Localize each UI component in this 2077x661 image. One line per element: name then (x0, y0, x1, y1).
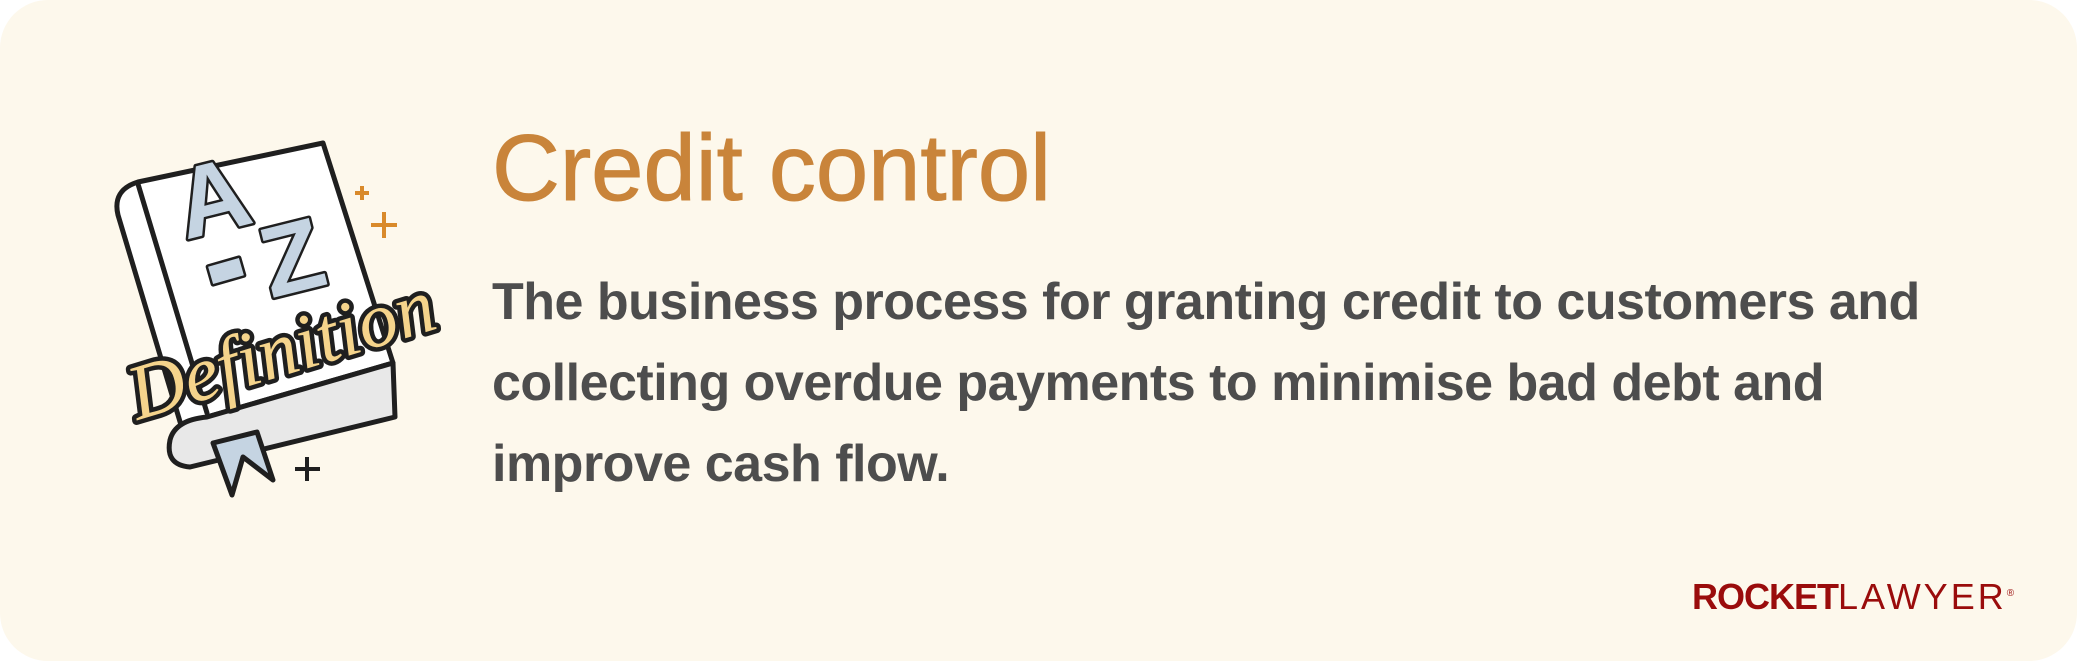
icon: A-Z definition book (114, 135, 445, 498)
icon: A-Z definition book: Z (249, 196, 335, 320)
text block: definition (492, 273, 1920, 493)
text block: definition: collecting overdue payments to minimise bad debt and (492, 354, 1824, 412)
icon: A-Z definition book: A (164, 135, 261, 261)
icon: A-Z definition book: Definition (116, 261, 445, 437)
text block: definition: The business process for granting credit to customers and (492, 273, 1920, 331)
text block: definition: improve cash flow. (492, 435, 949, 493)
title: Credit control (492, 115, 1051, 220)
logo: Rocket Lawyer: ROCKETLAWYER® (1692, 576, 2014, 617)
